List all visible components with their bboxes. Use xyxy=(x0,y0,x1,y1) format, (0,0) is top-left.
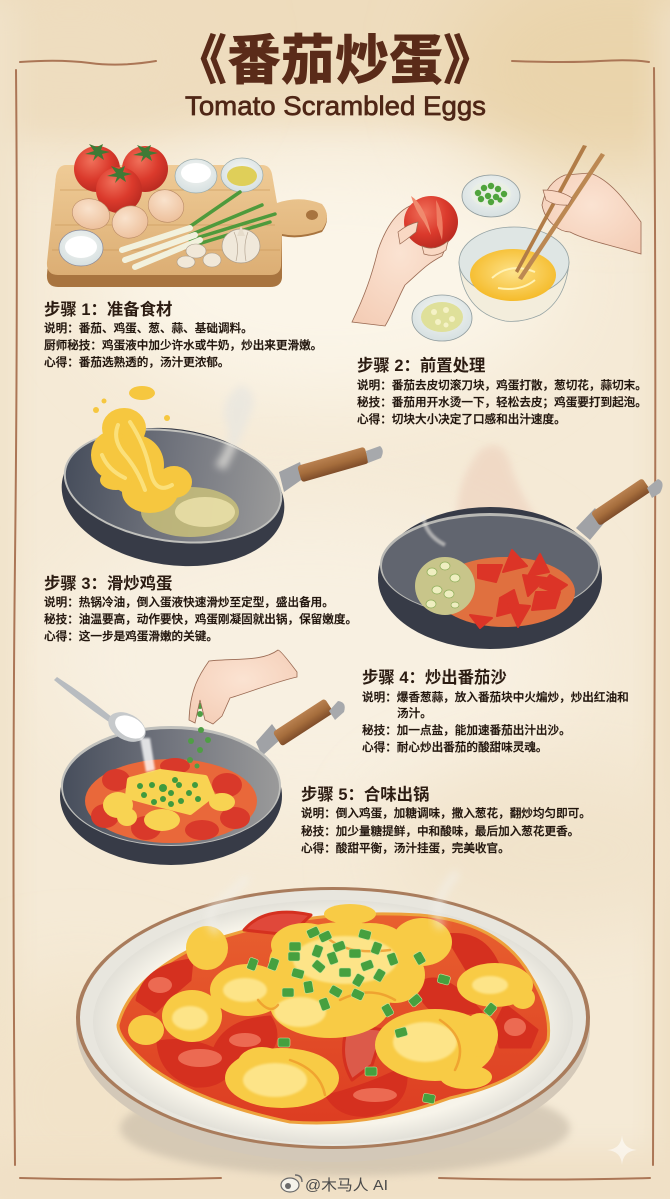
tomatoes xyxy=(74,144,168,213)
scallion pieces xyxy=(246,926,498,1104)
icon: weibo xyxy=(281,1175,302,1192)
step 4 text: 汤汁。 xyxy=(397,706,432,720)
illustration: wok with hand and spoon seasoning xyxy=(54,650,345,865)
icon: sparkle xyxy=(607,1135,637,1165)
illustration: bowl of beaten egg with chopsticks and hand xyxy=(459,145,641,321)
tomatoes xyxy=(137,912,537,1115)
step 1 text: 步骤 1：准备食材 xyxy=(44,300,172,319)
hand xyxy=(189,650,297,724)
tomato sauce xyxy=(435,557,575,627)
step 4 text: 步骤 4：炒出番茄沙 xyxy=(362,668,507,687)
step 3 text: 步骤 3：滑炒鸡蛋 xyxy=(44,574,172,593)
illustration: wok frying tomatoes xyxy=(378,446,663,649)
step 1 text: 说明：番茄、鸡蛋、葱、蒜、基础调料。 xyxy=(44,321,253,335)
step 4 text: 心得：耐心炒出番茄的酸甜味灵魂。 xyxy=(362,740,548,754)
step 4 text xyxy=(362,668,629,754)
step 3 text: 说明：热锅冷油，倒入蛋液快速滑炒至定型，盛出备用。 xyxy=(44,595,334,609)
subtitle: Tomato Scrambled Eggs xyxy=(185,91,486,121)
step 1 text xyxy=(44,300,322,369)
illustration: small bowl of minced garlic xyxy=(412,295,472,341)
scrambled eggs xyxy=(128,904,535,1108)
steam xyxy=(215,385,254,470)
step 5 text: 心得：酸甜平衡，汤汁挂蛋，完美收官。 xyxy=(301,841,510,855)
step 3 text: 心得：这一步是鸡蛋滑嫩的关键。 xyxy=(44,629,218,643)
step 5 text: 说明：倒入鸡蛋，加糖调味，撒入葱花，翻炒均匀即可。 xyxy=(301,806,591,820)
eggs xyxy=(69,185,188,242)
step 3 text xyxy=(44,574,357,643)
step 2 text: 步骤 2：前置处理 xyxy=(357,356,485,375)
falling scallions xyxy=(187,703,211,768)
watermark xyxy=(281,1175,388,1194)
step 1 text: 心得：番茄选熟透的，汤汁更浓郁。 xyxy=(44,355,230,369)
watermark: @木马人 AI xyxy=(305,1177,388,1194)
step 4 text: 秘技：加一点盐，能加速番茄出汁出沙。 xyxy=(362,723,571,737)
illustration: finished plate of tomato scrambled eggs xyxy=(76,875,590,1176)
sauce xyxy=(118,914,549,1123)
steam xyxy=(210,875,455,930)
egg highlights xyxy=(172,936,508,1097)
illustration: small bowl of scallions xyxy=(462,175,520,217)
scallion and garlic xyxy=(415,557,475,615)
step 2 text xyxy=(357,356,647,426)
title: 《番茄炒蛋》 xyxy=(173,16,497,95)
scrambled egg xyxy=(91,386,192,513)
plate shadow xyxy=(120,1080,570,1176)
step 2 text: 秘技：番茄用开水烫一下，轻松去皮；鸡蛋要打到起泡。 xyxy=(357,395,647,409)
illustration: wok with tossed egg xyxy=(53,385,383,580)
hand xyxy=(542,173,641,254)
steam xyxy=(458,446,545,530)
garlic xyxy=(177,226,260,268)
tomato highlights xyxy=(148,977,526,1102)
step 3 text: 秘技：油温要高，动作要快，鸡蛋刚凝固就出锅，保留嫩度。 xyxy=(44,612,357,626)
illustration: cutting board with ingredients xyxy=(47,144,327,287)
spoon with salt xyxy=(54,677,155,772)
tomato chunks xyxy=(470,550,567,628)
plate xyxy=(76,892,590,1162)
small bowls of seasoning xyxy=(59,158,263,266)
step 5 text: 秘技：加少量糖提鲜，中和酸味，最后加入葱花更香。 xyxy=(301,824,579,838)
green onions xyxy=(122,192,275,267)
step 5 text: 步骤 5：合味出锅 xyxy=(301,785,429,804)
egg shading xyxy=(258,940,460,1095)
step 5 text xyxy=(301,785,591,855)
step 2 text: 说明：番茄去皮切滚刀块，鸡蛋打散，葱切花，蒜切末。 xyxy=(357,378,647,392)
illustration: hand holding peeled tomato xyxy=(352,196,458,326)
step 1 text: 厨师秘技：鸡蛋液中加少许水或牛奶，炒出来更滑嫩。 xyxy=(44,338,322,352)
step 2 text: 心得：切块大小决定了口感和出汁速度。 xyxy=(357,412,566,426)
cooking oil xyxy=(141,487,239,537)
food in wok xyxy=(85,758,257,843)
step 4 text: 说明：爆香葱蒜，放入番茄块中火煸炒，炒出红油和 xyxy=(362,690,629,704)
